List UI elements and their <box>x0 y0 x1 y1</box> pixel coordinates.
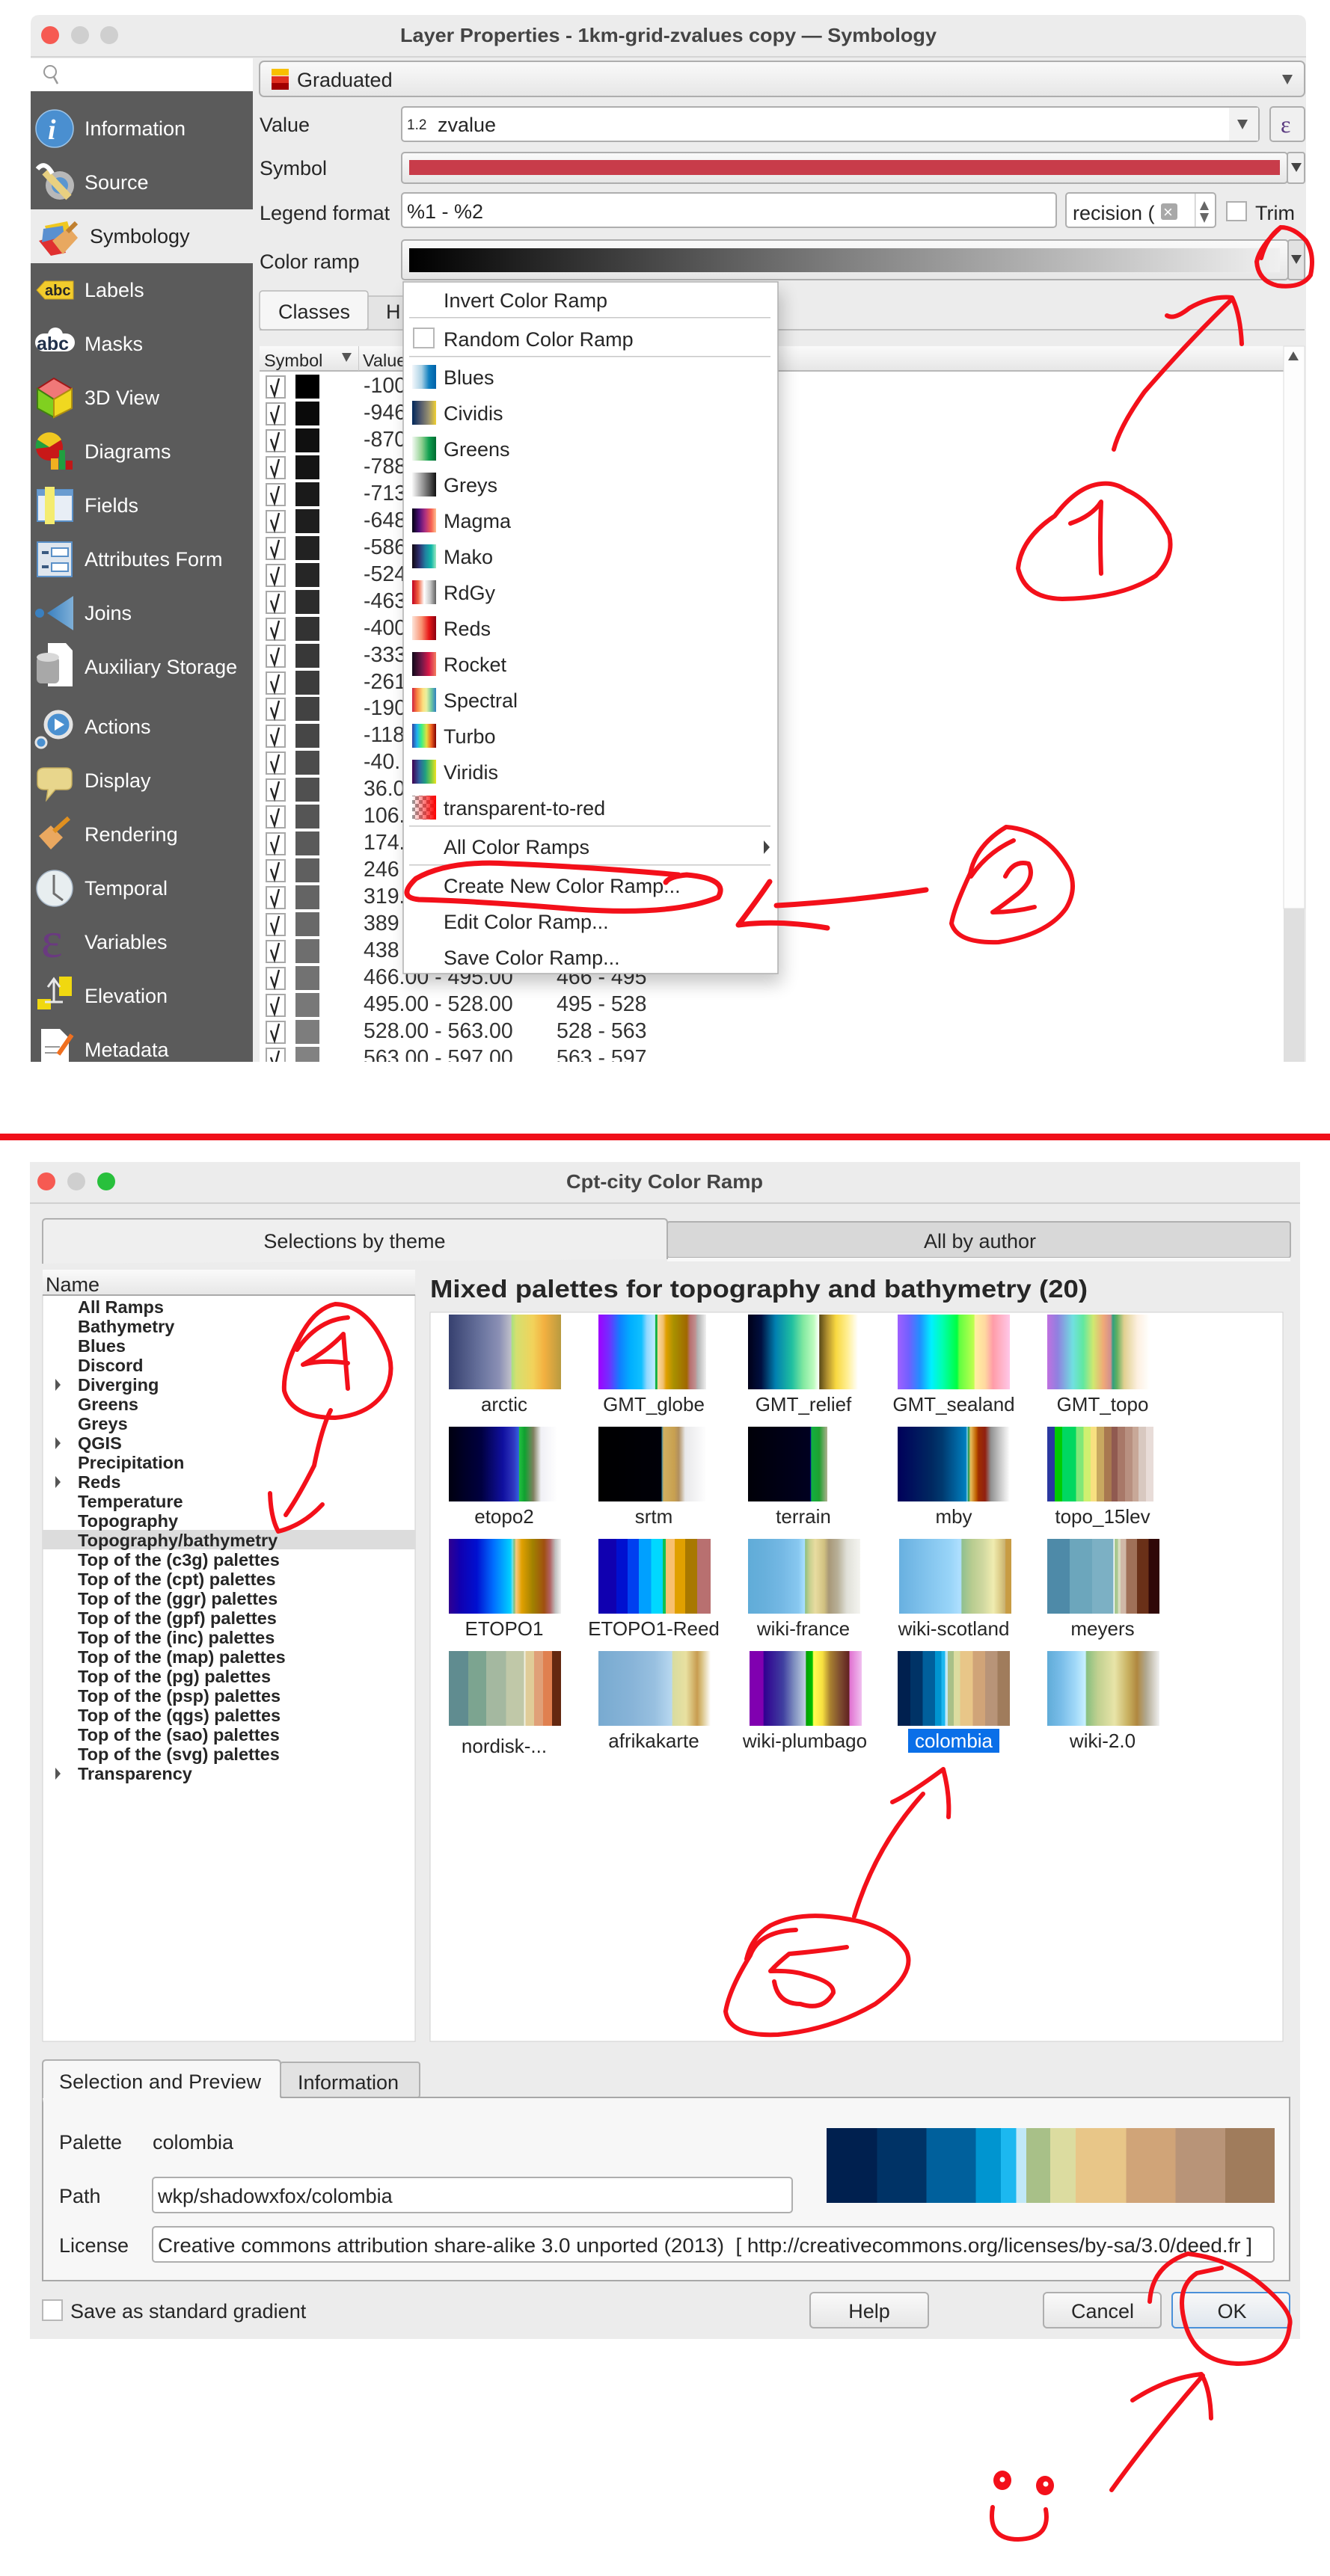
tree: theme list: Precipitation <box>78 1453 184 1472</box>
swatch: ETOPO1: ETOPO1 <box>465 1617 544 1640</box>
tabs: classes and histogram <box>260 291 1305 331</box>
tree: theme list: Blues <box>78 1336 126 1356</box>
field: Legend format <box>260 193 1295 227</box>
arrow: step 5 pointing to colombia <box>854 1769 949 1916</box>
table: graduated classes: 495.00 - 528.00 <box>364 992 513 1016</box>
dropdown menu: color ramps: transparent-to-red <box>444 797 605 820</box>
icon: temporal <box>37 870 73 906</box>
title bar <box>31 24 1306 58</box>
arrow: pointing to OK button <box>1112 2374 1211 2490</box>
table: graduated classes: -713 <box>364 482 406 505</box>
icon: source <box>37 165 74 200</box>
form: selected palette details: Path <box>59 2185 101 2207</box>
tabs: classes and histogram: H <box>386 301 401 323</box>
form: selected palette details: License <box>59 2234 129 2257</box>
sidebar navigation: Diagrams <box>85 440 171 463</box>
table: graduated classes: 528.00 - 563.00 <box>364 1019 513 1043</box>
dropdown menu: color ramps: RdGy <box>444 582 496 604</box>
swatch: mby: mby <box>935 1505 972 1528</box>
sidebar navigation: Temporal <box>85 877 168 900</box>
field: Legend format: Trim <box>1255 202 1295 224</box>
dropdown menu: color ramps: Blues <box>444 366 494 389</box>
icon: rendering <box>39 818 69 849</box>
arrow: step 2 pointing left to menu item <box>738 882 926 928</box>
arrow: step 1 pointing to dropdown <box>1114 298 1242 449</box>
swatch: mby <box>898 1427 1010 1528</box>
tree: theme list: Top of the (map) palettes <box>78 1647 286 1667</box>
tabs: selections by theme and all by author: All by author <box>924 1230 1036 1252</box>
swatch: ETOPO1 <box>449 1539 561 1640</box>
heading: mixed palettes: Mixed palettes for topography and bathymetry (20) <box>430 1275 1088 1303</box>
dropdown menu: color ramps: Cividis <box>444 402 503 425</box>
title bar: Layer Properties - 1km-grid-zvalues copy — Symbology <box>400 24 937 46</box>
swatch: wiki-france <box>748 1539 860 1640</box>
table: graduated classes: -190 <box>364 696 406 720</box>
table: graduated classes: 246 <box>364 858 399 882</box>
field: Symbol <box>260 153 1305 183</box>
sidebar navigation: Metadata <box>85 1039 170 1061</box>
swatch: meyers <box>1047 1539 1159 1640</box>
dropdown menu: color ramps: Greens <box>444 438 510 461</box>
swatch: wiki-2.0 <box>1047 1651 1159 1752</box>
tree: theme list: Top of the (cpt) palettes <box>78 1570 276 1589</box>
title bar: Cpt-city Color Ramp <box>566 1170 763 1193</box>
button: OK <box>1172 2293 1290 2328</box>
dropdown menu: color ramps: Mako <box>444 546 493 568</box>
swatch: colombia selected: colombia <box>915 1730 993 1752</box>
tree: theme list: Top of the (svg) palettes <box>78 1745 280 1764</box>
checkbox: save as standard gradient: Save as standard gradient <box>70 2300 307 2323</box>
form: selected palette details: wkp/shadowxfox/colombia <box>157 2185 393 2207</box>
sidebar navigation: Display <box>85 769 151 792</box>
sidebar navigation: Masks <box>85 333 143 355</box>
table: graduated classes: -333 <box>364 643 406 667</box>
button: Cancel: Cancel <box>1071 2300 1134 2323</box>
button: Cancel <box>1044 2293 1161 2328</box>
field: Color ramp: Color ramp <box>260 250 360 273</box>
table: graduated classes: Value <box>363 351 406 370</box>
swatch: topo_15lev <box>1047 1427 1153 1528</box>
dropdown menu: color ramps: Spectral <box>444 689 518 712</box>
panel: QGIS Layer Properties dialog <box>31 15 1306 1071</box>
tree: theme list: All Ramps <box>78 1297 164 1317</box>
swatch: arctic: arctic <box>481 1393 527 1415</box>
table: graduated classes: 466 - 495 <box>557 965 646 989</box>
sidebar navigation: Information <box>85 117 186 140</box>
icon: labels: abc <box>45 283 70 299</box>
swatch: etopo2 <box>449 1427 557 1528</box>
icon: labels <box>37 281 73 299</box>
icon: auxiliary storage <box>37 643 73 686</box>
swatch: topo_15lev: topo_15lev <box>1055 1505 1150 1528</box>
sidebar navigation <box>31 58 253 1062</box>
icon: symbology <box>39 221 78 256</box>
form: selected palette details <box>59 2131 1274 2262</box>
tree: theme list: Top of the (sao) palettes <box>78 1725 280 1745</box>
table: graduated classes: 174. <box>364 831 405 855</box>
table: graduated classes: 528 - 563 <box>557 1019 646 1043</box>
swatch: terrain <box>748 1427 831 1528</box>
annotation: circled number 2 <box>951 827 1073 942</box>
table: graduated classes: 106. <box>364 804 405 828</box>
table: graduated classes: 563.00 - 597.00 <box>364 1046 513 1070</box>
icon: 3D view <box>37 378 72 417</box>
swatch: GMT_topo <box>1047 1315 1150 1415</box>
swatch: GMT_relief <box>748 1315 858 1415</box>
annotation: circled number 5 <box>726 1916 908 2035</box>
table: graduated classes: -100 <box>364 374 406 398</box>
swatch: meyers: meyers <box>1070 1617 1135 1640</box>
tree: theme list: Bathymetry <box>78 1317 174 1336</box>
icon: information: i <box>48 114 56 146</box>
sidebar navigation: Symbology <box>90 225 190 248</box>
annotation: circled number 1 <box>1018 484 1171 599</box>
swatch: ETOPO1-Reed: ETOPO1-Reed <box>588 1617 720 1640</box>
swatch: afrikakarte: afrikakarte <box>608 1730 699 1752</box>
tabs: selection and preview, information: Selection and Preview <box>59 2071 262 2093</box>
swatch: etopo2: etopo2 <box>474 1505 534 1528</box>
swatch: srtm: srtm <box>635 1505 672 1528</box>
table: graduated classes: -648 <box>364 508 406 532</box>
dropdown menu: color ramps: Magma <box>444 510 512 532</box>
table: graduated classes: 466.00 - 495.00 <box>364 965 513 989</box>
tree: theme list: Greens <box>78 1395 138 1414</box>
tree: theme list: Transparency <box>78 1764 192 1783</box>
sidebar navigation: Source <box>85 171 149 194</box>
swatch: wiki-scotland <box>898 1539 1011 1640</box>
tabs: classes and histogram: Classes <box>278 301 350 323</box>
field: Legend format: %1 - %2 <box>407 200 483 223</box>
annotation: oval around Create New Color Ramp <box>407 863 720 911</box>
tabs: selection and preview, information: Information <box>298 2071 399 2094</box>
table: graduated classes: -586 <box>364 535 406 559</box>
icon: variables: ε <box>41 912 63 968</box>
field: Legend format: × <box>1163 203 1173 221</box>
table: graduated classes: 563 - 597 <box>557 1046 646 1070</box>
tabs: selection and preview, information <box>43 2060 1290 2281</box>
table: graduated classes: 36.0 <box>364 777 405 801</box>
dropdown menu: color ramps: Create New Color Ramp... <box>444 875 681 897</box>
form: selected palette details: colombia <box>153 2131 234 2154</box>
swatch: wiki-plumbago: wiki-plumbago <box>742 1730 867 1752</box>
tree: theme list: Top of the (qgs) palettes <box>78 1706 281 1725</box>
swatch: colombia selected <box>898 1651 1010 1753</box>
tree: theme list: Top of the (c3g) palettes <box>78 1550 280 1570</box>
sidebar navigation: 3D View <box>85 387 160 409</box>
tree: theme list: Discord <box>78 1356 144 1375</box>
field: Symbol: Symbol <box>260 157 327 179</box>
table: graduated classes: -524 <box>364 562 406 586</box>
tree: theme list: Topography/bathymetry <box>78 1531 278 1550</box>
table: graduated classes: -261 <box>364 670 406 694</box>
divider: red horizontal line <box>0 1134 1330 1140</box>
sidebar navigation: Variables <box>85 931 168 953</box>
swatch: ETOPO1-Reed <box>588 1539 720 1640</box>
swatch: GMT_globe: GMT_globe <box>603 1393 705 1415</box>
table: graduated classes: 319. <box>364 885 405 909</box>
swatch: afrikakarte <box>598 1651 711 1752</box>
swatch: nordisk: nordisk-... <box>462 1735 547 1757</box>
sidebar navigation: Elevation <box>85 985 168 1007</box>
sidebar navigation: Fields <box>85 494 138 517</box>
table: graduated classes: 389 <box>364 912 399 935</box>
tree: theme list: Top of the (psp) palettes <box>78 1686 281 1706</box>
arrow: A pointing to Topography/bathymetry <box>270 1410 331 1531</box>
sidebar navigation: Joins <box>85 602 132 624</box>
swatch: wiki-2.0: wiki-2.0 <box>1069 1730 1136 1752</box>
table: graduated classes: Symbol <box>264 351 322 370</box>
sidebar navigation: Attributes Form <box>85 548 223 571</box>
dropdown menu: color ramps: Greys <box>444 474 497 497</box>
field: Legend format: recision ( <box>1073 202 1155 224</box>
swatch: nordisk <box>449 1651 561 1757</box>
swatch: wiki-scotland: wiki-scotland <box>898 1617 1009 1640</box>
swatch: GMT_relief: GMT_relief <box>756 1393 852 1415</box>
icon: diagrams <box>36 432 73 470</box>
icon: information <box>36 110 73 147</box>
table: graduated classes: -400 <box>364 616 406 640</box>
button: Help: Help <box>848 2300 890 2323</box>
dropdown menu: color ramps: Reds <box>444 618 491 640</box>
field: Color ramp <box>260 240 1305 280</box>
tree: theme list: Top of the (inc) palettes <box>78 1628 275 1647</box>
panel: Cpt-city Color Ramp dialog <box>30 1162 1300 2339</box>
table: graduated classes: -788 <box>364 455 406 479</box>
icon: masks <box>35 328 75 354</box>
tree: theme list: Greys <box>78 1414 128 1433</box>
dropdown menu: color ramps: Save Color Ramp... <box>444 947 620 969</box>
dropdown: Graduated: Graduated <box>297 69 393 91</box>
tree: theme list: Reds <box>78 1472 120 1492</box>
swatch: GMT_sealand <box>892 1315 1015 1415</box>
dropdown menu: color ramps: Viridis <box>444 761 498 784</box>
icon: metadata <box>41 1029 72 1062</box>
tree: theme list: Diverging <box>78 1375 159 1395</box>
dropdown menu: color ramps: Rocket <box>444 654 507 676</box>
dropdown menu: color ramps: Random Color Ramp <box>444 328 634 351</box>
tree: theme list: Topography <box>78 1511 178 1531</box>
dropdown menu: color ramps <box>403 282 782 983</box>
swatch: GMT_sealand: GMT_sealand <box>892 1393 1015 1415</box>
icon: masks: abc <box>37 333 69 354</box>
annotation: circle around OK button <box>1150 2254 1290 2364</box>
tabs: selections by theme and all by author <box>43 1219 1290 1264</box>
icon: actions <box>36 712 71 748</box>
dropdown menu: color ramps: Turbo <box>444 725 496 748</box>
table: graduated classes: -118 <box>364 723 405 747</box>
button: Help <box>810 2293 928 2328</box>
button: OK: OK <box>1217 2300 1247 2323</box>
table: graduated classes <box>260 346 1305 1071</box>
icon: elevation <box>37 977 72 1009</box>
table: graduated classes: -463 <box>364 589 406 613</box>
field: Value: 1.2 <box>407 117 426 133</box>
tree: theme list: Top of the (pg) palettes <box>78 1667 271 1686</box>
swatch: wiki-plumbago <box>742 1651 867 1752</box>
tree: theme list: Name <box>46 1273 99 1296</box>
swatch: srtm <box>598 1427 707 1528</box>
tree: theme list: QGIS <box>78 1433 122 1453</box>
form: selected palette details: Palette <box>59 2131 122 2154</box>
dropdown menu: color ramps: Edit Color Ramp... <box>444 911 609 933</box>
table: graduated classes: 495 - 528 <box>557 992 646 1016</box>
sidebar navigation: Labels <box>85 279 144 301</box>
dropdown menu: color ramps: Invert Color Ramp <box>444 289 607 312</box>
swatch: wiki-france: wiki-france <box>756 1617 850 1640</box>
icon: display <box>37 768 72 800</box>
sidebar navigation: Rendering <box>85 823 178 846</box>
title bar <box>30 1170 1300 1204</box>
annotation: smiley face <box>992 2471 1054 2539</box>
icon: fields <box>37 487 73 524</box>
swatch: arctic <box>449 1315 561 1415</box>
field: Value: ε <box>1281 111 1290 138</box>
form: renderer type and settings <box>260 61 1305 280</box>
swatch: GMT_topo: GMT_topo <box>1057 1393 1148 1415</box>
tree: theme list <box>43 1270 415 2041</box>
tree: theme list: Top of the (gpf) palettes <box>78 1608 277 1628</box>
annotation: circled letter A <box>284 1304 390 1418</box>
swatch: GMT_globe <box>598 1315 706 1415</box>
form: selected palette details: Creative commons attribution share-alike 3.0 unported (2013) [ http://creativecommons.org/licenses/by-sa/3.0/deed.fr ] <box>158 2234 1252 2257</box>
field: Value: Value <box>260 114 310 136</box>
tabs: selections by theme and all by author: Selections by theme <box>263 1230 446 1252</box>
field: Value <box>260 107 1305 141</box>
dropdown: Graduated <box>260 61 1305 96</box>
icon: joins <box>35 596 73 630</box>
sidebar navigation: Actions <box>85 716 151 738</box>
table: graduated classes: 438 <box>364 938 399 962</box>
field: Value: zvalue <box>438 114 496 136</box>
table: graduated classes: -946 <box>364 401 406 425</box>
annotation: step 1 circle around dropdown arrow <box>1257 227 1312 286</box>
tree: theme list: Temperature <box>78 1492 183 1511</box>
gallery: palette swatches <box>430 1312 1283 2041</box>
preview: colombia color ramp <box>827 2128 1275 2203</box>
field: Legend format: Legend format <box>260 202 390 224</box>
table: graduated classes: -870 <box>364 428 406 452</box>
table: graduated classes: -40. <box>364 750 400 774</box>
tree: theme list: Top of the (ggr) palettes <box>78 1589 278 1608</box>
sidebar navigation: Auxiliary Storage <box>85 656 237 678</box>
icon: attributes form <box>37 542 72 577</box>
dropdown menu: color ramps: All Color Ramps <box>444 836 589 858</box>
swatch: terrain: terrain <box>776 1505 831 1528</box>
